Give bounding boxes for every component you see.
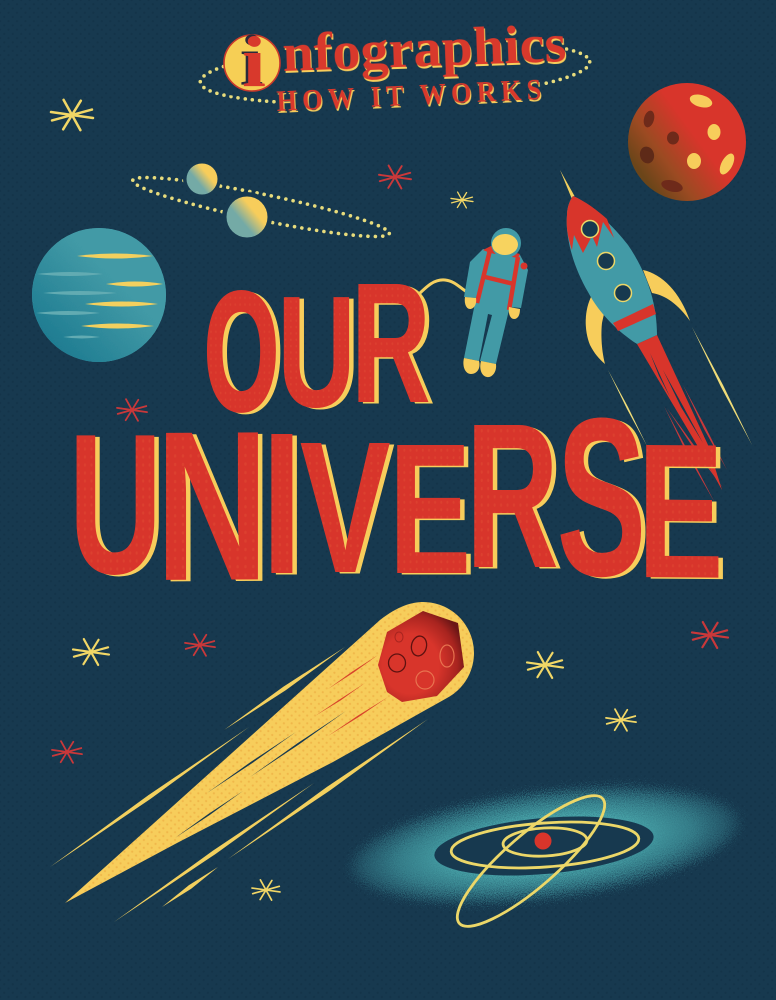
logo: infographics how it works: [224, 13, 567, 118]
star: red lower mid: [185, 634, 215, 656]
star: yellow bottom: [252, 880, 280, 900]
red streaks: [315, 655, 388, 736]
orbit with two moons: [130, 160, 392, 246]
small moon: [183, 160, 221, 198]
straps: [477, 246, 528, 310]
tail and head glow: [65, 602, 474, 903]
rocket: [560, 170, 752, 503]
suit: [464, 249, 528, 364]
large moon: [222, 192, 272, 242]
title line: UNIVERSE: S: [557, 372, 646, 624]
tether: [417, 280, 467, 296]
dark core: [432, 809, 656, 883]
logo icon: i in circle: [224, 23, 280, 102]
helmet: [491, 228, 521, 258]
title: our universe: [69, 246, 723, 626]
red nose: [567, 196, 614, 253]
core star: [534, 832, 552, 850]
logo: dotted oval: [198, 47, 592, 104]
title line: OUR: O: [204, 258, 279, 447]
yellow bands: [77, 254, 163, 328]
light bands: [36, 272, 117, 338]
star: small yellow: [451, 192, 473, 208]
title line: UNIVERSE: U: [69, 392, 162, 616]
planet: red cratered: [628, 83, 746, 201]
title line: UNIVERSE: E: [389, 405, 471, 613]
craters: [388, 632, 454, 689]
title line: UNIVERSE: V: [300, 403, 391, 612]
title line: UNIVERSE: E: [638, 403, 723, 619]
logo subtitle: HOW IT WORKS: [276, 74, 542, 118]
speed lines: [692, 327, 752, 445]
dark slits: [175, 711, 346, 838]
star: red right: [692, 622, 728, 648]
star: red lower left: [52, 741, 82, 763]
star: yellow lower left: [73, 639, 109, 665]
title line: UNIVERSE: N: [156, 386, 268, 626]
rock: [378, 611, 464, 702]
fins: [643, 270, 690, 321]
logo word: nfographics: nfographics: [281, 13, 567, 83]
antenna: [560, 170, 574, 198]
galaxy: [342, 766, 748, 943]
comet: [50, 602, 474, 922]
title line: OUR: U: [277, 263, 356, 440]
orbit rings: [442, 779, 640, 943]
visor: [492, 234, 518, 255]
logo icon: i in circle: i: [242, 23, 266, 102]
red band: [613, 304, 656, 331]
boots and gloves: [463, 297, 520, 377]
star: red left: [117, 399, 147, 421]
title line: OUR: [204, 246, 431, 447]
star: top left yellow: [51, 100, 93, 130]
title line: UNIVERSE: R: [466, 381, 559, 611]
title line: UNIVERSE: I: [262, 391, 302, 617]
portholes: [582, 220, 632, 302]
astronaut: [417, 228, 528, 377]
planet: blue striped: [29, 225, 169, 365]
body: [567, 196, 657, 344]
star: yellow centre right: [527, 652, 563, 678]
star: yellow right: [606, 709, 636, 731]
title line: UNIVERSE: [69, 372, 723, 626]
outer glow: [342, 766, 748, 924]
speed lines: [50, 647, 428, 922]
star: red top: [379, 165, 411, 189]
flame: [637, 335, 727, 503]
title line: OUR: R: [351, 246, 431, 439]
